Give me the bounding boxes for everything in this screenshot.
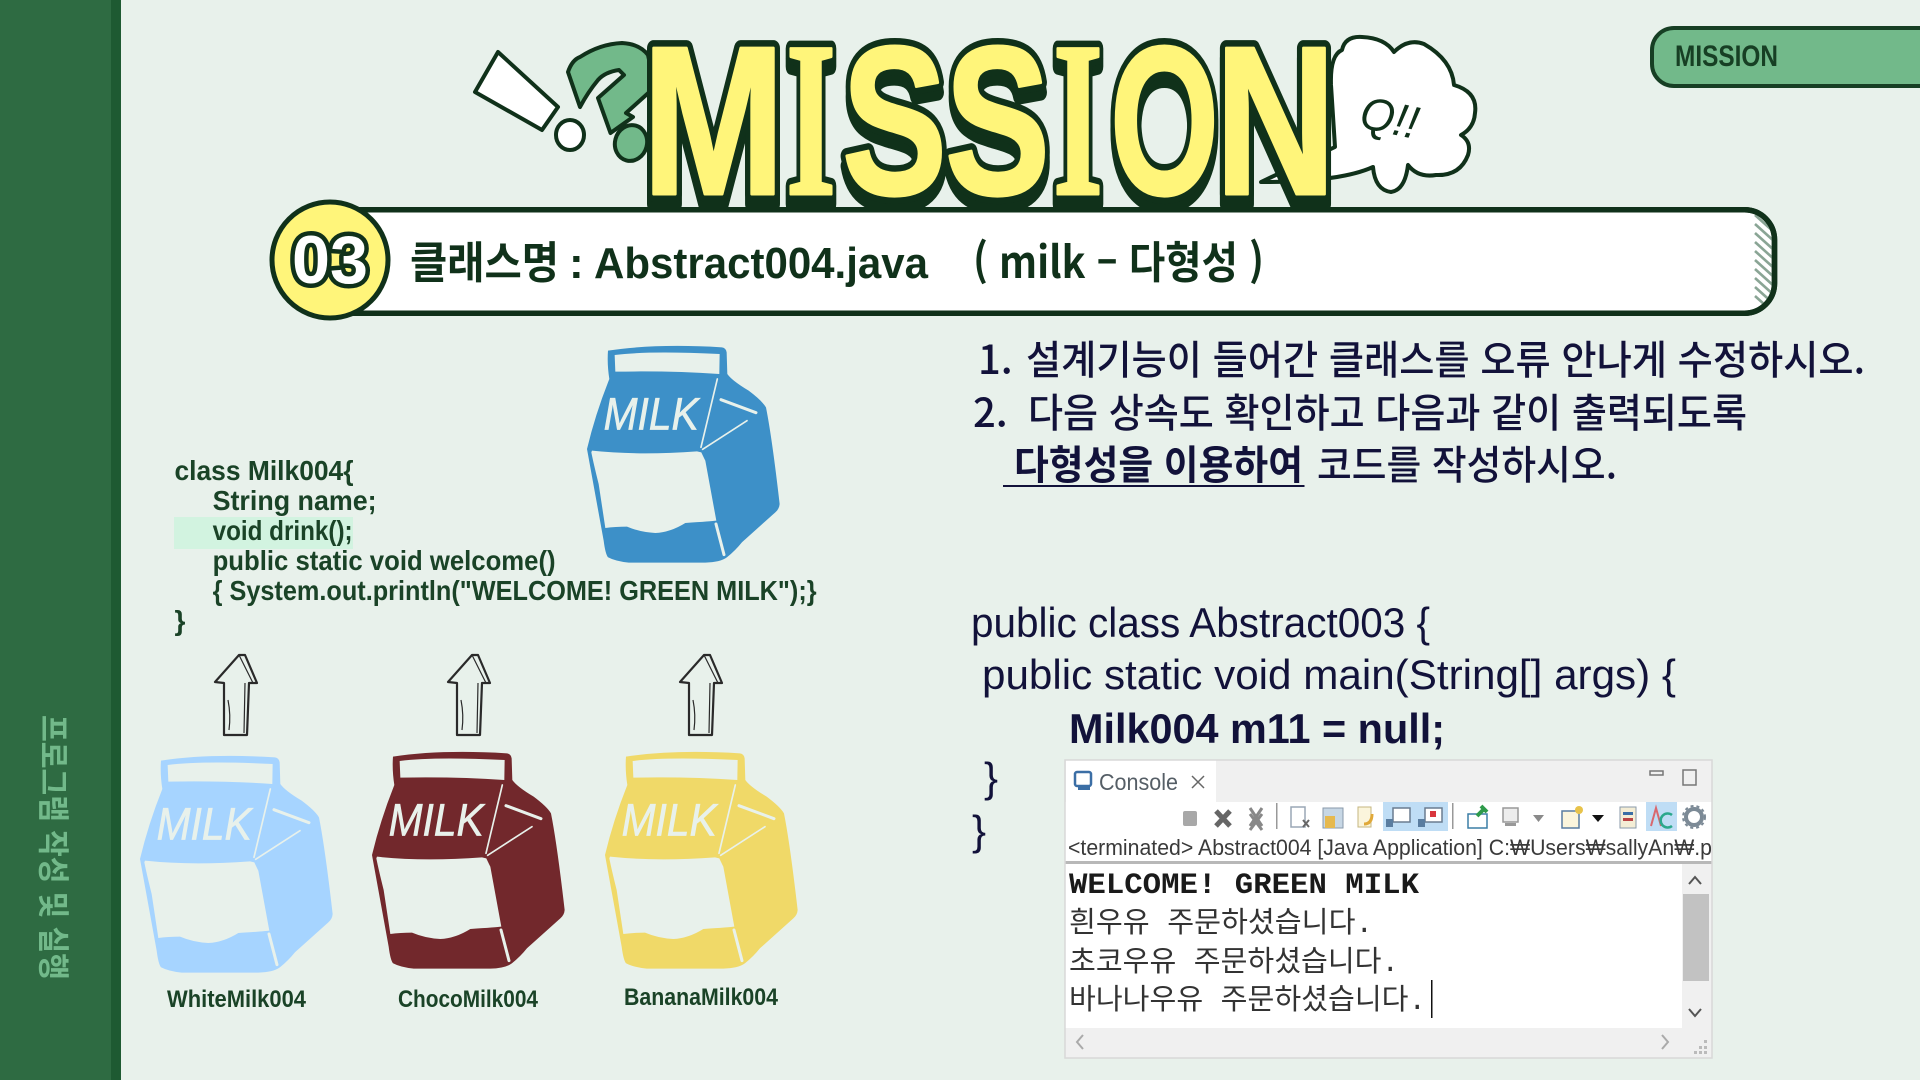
milk carton: blue parent: MILK <box>604 388 700 439</box>
heading text: Abstract004.java <box>594 239 929 288</box>
icon: question mark <box>568 43 655 165</box>
label: BananaMilk004: BananaMilk004 <box>624 984 779 1011</box>
arrow 2 <box>448 655 490 735</box>
title: MISSION: O <box>1110 12 1219 249</box>
main code block: } <box>984 754 998 801</box>
title: MISSION: S <box>945 2 1050 239</box>
badge number: 03 <box>292 222 368 298</box>
title: MISSION: S <box>945 12 1050 249</box>
main code block: public static void main(String[] args) { <box>982 651 1676 698</box>
title: MISSION: N <box>1215 12 1336 249</box>
title: MISSION: S <box>842 12 947 249</box>
milk carton: choco milk <box>372 752 565 969</box>
main code block: Milk004 m11 = null; <box>1069 705 1445 752</box>
sidebar <box>0 0 121 1080</box>
main code block: public class Abstract003 { <box>971 599 1430 646</box>
sidebar vertical label: 프로그램 작성 및 실행 <box>32 715 78 980</box>
class code block: class Milk004{ <box>174 455 354 486</box>
console window <box>1065 760 1712 1058</box>
icon: exclamation mark <box>475 52 584 150</box>
milk carton: banana milk <box>605 752 798 969</box>
title: MISSION: M <box>642 2 785 239</box>
heading text <box>410 227 1264 291</box>
heading text: 클래스명 <box>410 227 559 291</box>
heading text: : <box>569 239 584 288</box>
number badge 03 <box>272 202 388 318</box>
title: MISSION: N <box>1215 2 1336 239</box>
console output: 흰우유 주문하셨습니다. <box>1069 906 1373 941</box>
instructions: 설계기능이 들어간 클래스를 오류 안나게 수정하시오. <box>1026 328 1865 386</box>
milk carton: choco milk: MILK <box>389 794 485 845</box>
title: MISSION: M <box>642 12 785 249</box>
arrow 3 <box>680 655 722 735</box>
inheritance arrows <box>215 655 722 735</box>
console tab: Console <box>1099 769 1178 795</box>
milk carton: blue parent <box>587 346 780 563</box>
section tab <box>1652 28 1920 86</box>
instructions: 1. <box>978 328 1013 386</box>
console toolbar <box>1183 802 1705 831</box>
tab label: MISSION <box>1675 40 1778 73</box>
class code block: void drink(); <box>213 515 353 546</box>
main code block <box>971 599 1676 854</box>
instructions: 다음 상속도 확인하고 다음과 같이 출력되도록 <box>1028 381 1747 439</box>
class code block: { System.out.println("WELCOME! GREEN MILK");} <box>213 575 817 606</box>
title: MISSION: O <box>1110 2 1219 239</box>
label: ChocoMilk004: ChocoMilk004 <box>398 986 539 1013</box>
console output: 초코우유 주문하셨습니다. <box>1069 945 1399 980</box>
console output: WELCOME! GREEN MILK <box>1069 869 1419 903</box>
title: MISSION: I <box>1053 0 1103 243</box>
heading text: ( milk – 다형성 ) <box>973 227 1264 291</box>
title: MISSION: M <box>642 2 785 239</box>
class code block: String name; <box>213 485 377 516</box>
speech bubble text: Q!! <box>1356 86 1424 149</box>
title: MISSION: I <box>1053 7 1103 253</box>
title: MISSION: I <box>786 0 836 243</box>
console status line: <terminated> Abstract004 [Java Application] C:₩Users₩sallyAn₩.p <box>1068 835 1712 860</box>
instructions: 2. <box>973 381 1008 439</box>
console output: 바나나우유 주문하셨습니다. <box>1069 983 1426 1018</box>
class code block: } <box>174 605 186 636</box>
heading bar <box>300 210 1775 314</box>
instructions: 다형성을 이용하여 <box>1014 433 1303 491</box>
milk carton: white milk <box>140 756 333 973</box>
title: MISSION: I <box>786 7 836 253</box>
title: MISSION: S <box>842 2 947 239</box>
title: MISSION <box>642 0 1336 253</box>
milk carton: banana milk: MILK <box>622 794 718 845</box>
highlight: abstract method <box>174 517 353 549</box>
arrow 1 <box>215 655 257 735</box>
main code block: } <box>972 807 986 854</box>
instructions <box>973 328 1865 491</box>
console scrollbars <box>1077 877 1709 1054</box>
title: MISSION: I <box>1053 0 1103 243</box>
title: MISSION: I <box>786 0 836 243</box>
speech bubble <box>1261 37 1475 192</box>
class code block: public static void welcome() <box>213 545 556 576</box>
window controls <box>1650 770 1696 785</box>
title: MISSION: S <box>945 2 1050 239</box>
title: MISSION: S <box>842 2 947 239</box>
console tab <box>1074 770 1204 790</box>
title: MISSION: N <box>1215 2 1336 239</box>
class code block <box>174 455 817 636</box>
milk carton: white milk: MILK <box>157 798 253 849</box>
console output <box>1065 864 1682 1028</box>
label: WhiteMilk004: WhiteMilk004 <box>167 986 307 1013</box>
title: MISSION: O <box>1110 2 1219 239</box>
instructions: 코드를 작성하시오. <box>1317 433 1617 491</box>
